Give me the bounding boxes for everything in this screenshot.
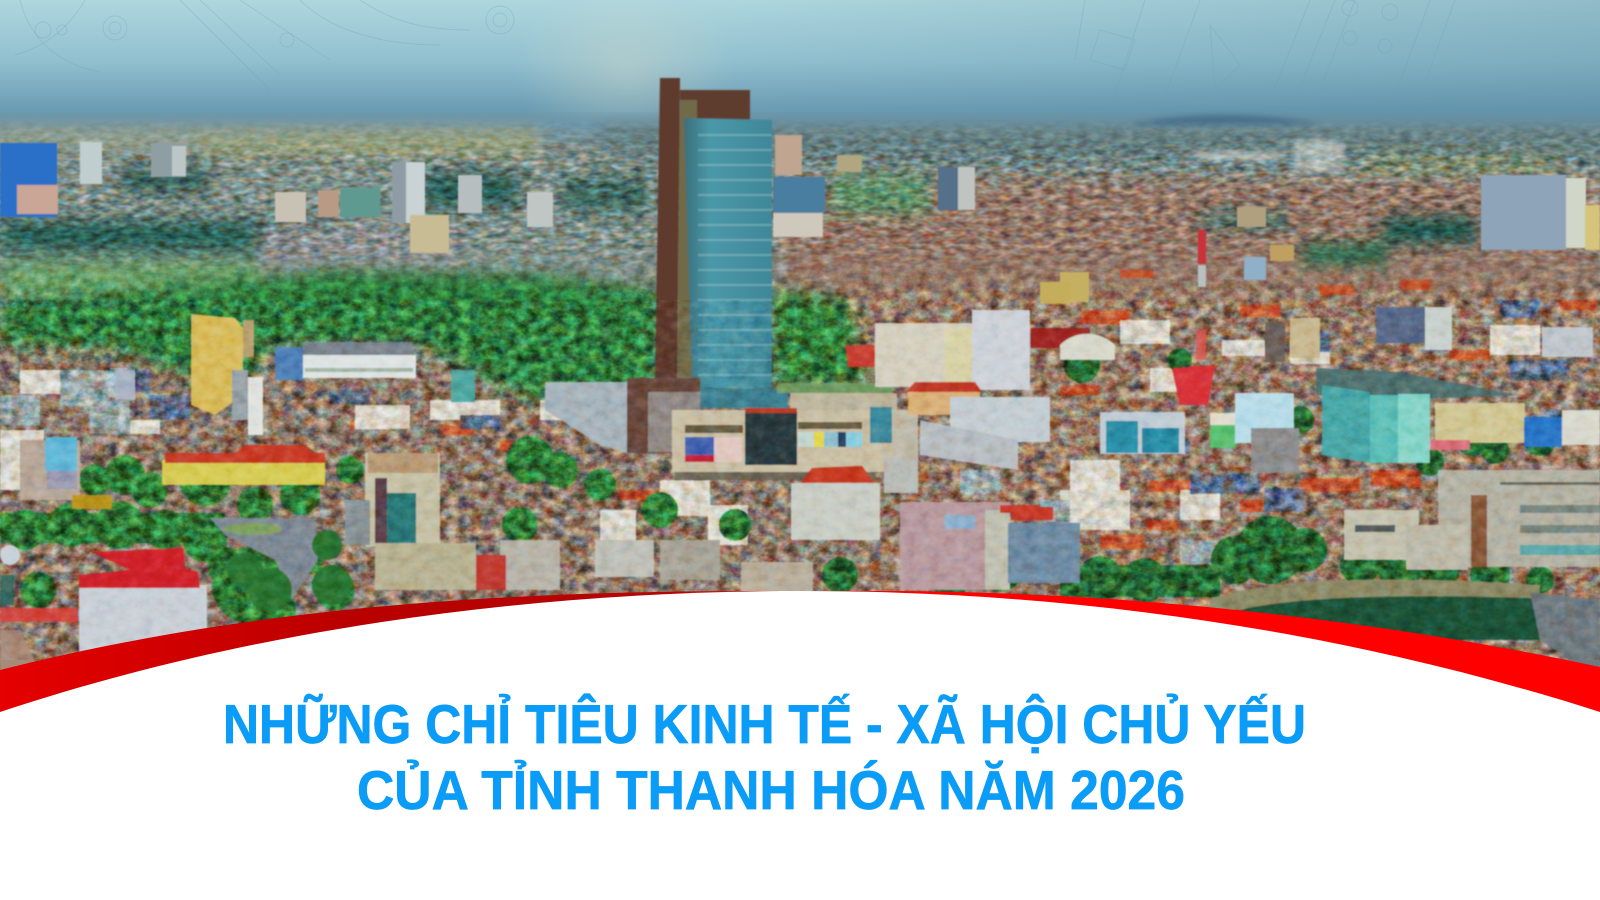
billboard building bbox=[20, 437, 80, 500]
billboard: left ad bbox=[685, 437, 742, 462]
yellow school bbox=[162, 445, 325, 485]
olive strip bbox=[677, 100, 697, 385]
near buildings left bbox=[0, 314, 560, 680]
shopping podium bbox=[545, 378, 918, 480]
title line 1: NHỮNG CHỈ TIÊU KINH TẾ - XÃ HỘI CHỦ YẾU bbox=[223, 693, 1306, 755]
residential houses mosaic bbox=[0, 270, 1596, 564]
white hotel red roof bbox=[791, 466, 880, 540]
large apartment block bbox=[1438, 470, 1600, 567]
building surface grain bbox=[0, 300, 1600, 660]
distant hill and pale blocks bbox=[1130, 115, 1344, 173]
red-roofed white building bbox=[79, 548, 207, 655]
brown slab bbox=[655, 78, 680, 380]
hotel bbox=[365, 453, 440, 547]
billboard: right ad bbox=[798, 432, 862, 447]
blue glass office bbox=[1100, 412, 1185, 454]
pink building bbox=[900, 502, 1010, 590]
near buildings right bbox=[1100, 230, 1600, 570]
title bbox=[223, 693, 1306, 821]
near buildings centre bbox=[595, 282, 1115, 592]
yellow tower bbox=[191, 314, 254, 415]
brown crown bbox=[680, 90, 750, 120]
far high-rise buildings bbox=[0, 135, 1600, 302]
main tower bbox=[655, 78, 772, 388]
roof hall bbox=[1316, 368, 1518, 400]
sky with faint ornament bbox=[0, 0, 1600, 160]
tonal photo grain bbox=[0, 124, 1600, 668]
white title panel bbox=[0, 591, 1600, 900]
teal tower bbox=[1322, 385, 1430, 463]
red radio mast bbox=[1172, 230, 1215, 405]
forest and near city base bbox=[0, 270, 1600, 620]
green tree clusters bbox=[0, 347, 1556, 636]
roundabout trees bbox=[227, 530, 352, 612]
city base tones bbox=[0, 128, 1600, 730]
glass facade bbox=[684, 118, 772, 388]
red swoosh right bbox=[760, 591, 1600, 730]
mid-rise white block bbox=[1344, 510, 1468, 570]
long white hall bbox=[275, 342, 416, 380]
church bbox=[1376, 307, 1452, 350]
pond and shoreline bbox=[1210, 580, 1600, 680]
mid distance city base bbox=[0, 160, 1600, 320]
roundabout bbox=[210, 518, 318, 600]
far landscape bbox=[0, 118, 1600, 177]
title line 2: CỦA TỈNH THANH HÓA NĂM 2026 bbox=[357, 759, 1185, 821]
red swoosh left bbox=[0, 591, 800, 730]
